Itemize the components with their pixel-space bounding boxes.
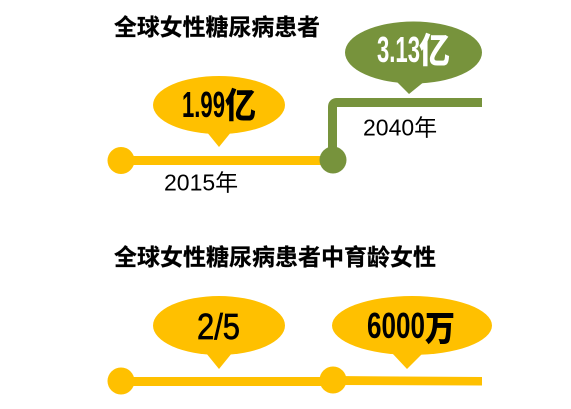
label: 2015年: 2015年 (164, 170, 238, 196)
start dot 2015 (108, 147, 134, 174)
callout: 1.99亿: 1.99 (182, 84, 225, 125)
green stepped line (332, 102, 482, 160)
title: women of childbearing age among patients: 全球女性糖尿病患者中育龄女性 (114, 244, 436, 270)
callout: 6000万 (332, 296, 492, 369)
yellow line segment (121, 156, 333, 165)
left line segment (121, 377, 333, 386)
title: global female diabetes patients: 全球女性糖尿病患者 (114, 14, 320, 40)
callout: 3.13亿: 3.13 (377, 29, 420, 70)
callout: 6000万: 6000 (367, 305, 425, 346)
right dot (320, 366, 346, 394)
callout: 1.99亿 (153, 76, 285, 147)
timeline: lower yellow (108, 366, 482, 394)
left dot (108, 368, 134, 394)
label: 2040年: 2040年 (363, 114, 437, 140)
callout: 3.13亿: 亿 (419, 23, 450, 74)
callout: 2/5: 2/5 (197, 306, 240, 347)
right line segment (333, 376, 482, 386)
timeline: 2015 to 2040 (108, 102, 482, 174)
callout: 6000万: 万 (425, 301, 455, 352)
callout: 3.13亿 (345, 22, 482, 94)
callout: 1.99亿: 亿 (225, 78, 256, 129)
end dot 2040 (320, 146, 346, 174)
callout: 2/5 (153, 296, 285, 369)
